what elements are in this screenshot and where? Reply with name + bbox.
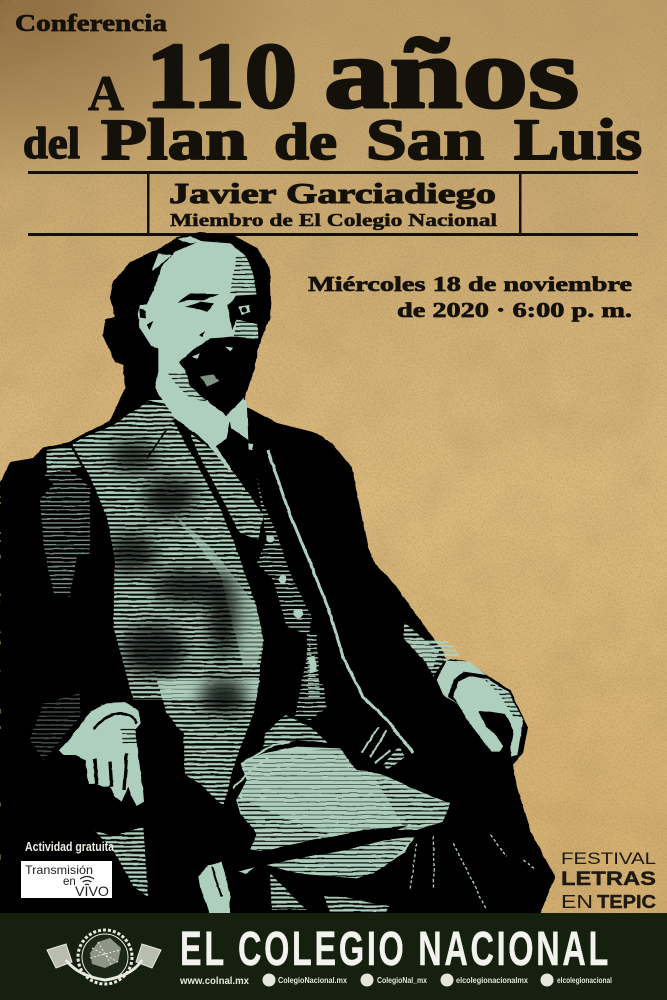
free activity note: Actividad gratuita [25, 839, 115, 854]
hand [59, 703, 144, 806]
skin [138, 241, 258, 448]
coat lower stripes [157, 680, 260, 807]
ear detail [139, 308, 146, 318]
festival label: FESTIVAL [561, 849, 656, 868]
title: Luis [514, 107, 642, 172]
festival label: TEPIC [597, 892, 656, 912]
left hand region [30, 678, 260, 913]
icon: twitter [360, 974, 374, 986]
speaker role: Miembro de El Colegio Nacional [170, 210, 497, 230]
lower hand speck [238, 867, 255, 873]
waistcoat edge line [268, 450, 413, 753]
title: del [23, 119, 80, 168]
left banner [47, 944, 72, 968]
live stream badge [21, 861, 112, 899]
forehead shade stripes [230, 255, 258, 295]
knee side stripes [93, 827, 148, 897]
title: 110 [146, 25, 297, 128]
sleeve specks [30, 693, 80, 760]
jacket bright lapel edge [170, 510, 263, 667]
live stream badge: VIVO [75, 883, 109, 899]
title: de [274, 114, 337, 171]
social links: ColegioNacional.mx [278, 975, 347, 985]
title: A [88, 65, 124, 121]
sleeve end stripes [405, 640, 460, 677]
hair highlight [152, 253, 172, 271]
vest stripes [257, 477, 312, 635]
live stream badge: Transmisión [25, 863, 93, 877]
watch chain fingers [362, 727, 391, 763]
lapel notch line [147, 430, 167, 458]
right sleeve stripes [404, 622, 439, 670]
lower leg stripes [263, 835, 417, 880]
left eye [185, 302, 214, 312]
icon: youtube [440, 974, 454, 986]
thigh lower shade [237, 797, 330, 853]
vest lower specks [307, 633, 320, 700]
icon: instagram [540, 974, 554, 986]
neck stripes [167, 372, 207, 402]
date and time: de 2020 · 6:00 p. m. [397, 298, 632, 322]
coat lower shadow [200, 678, 247, 715]
footer band [0, 913, 667, 1000]
finger gap [478, 712, 513, 755]
left brow [177, 293, 219, 302]
hair top highlight [177, 236, 203, 243]
icon: wifi [80, 876, 94, 885]
thigh [237, 747, 450, 853]
vest side of lapel stripes [190, 433, 263, 540]
right eye glint [238, 305, 251, 315]
belly stripes [383, 747, 405, 769]
mouth highlight [200, 374, 219, 387]
finger gaps [95, 753, 127, 790]
social links [179, 974, 612, 987]
festival label: EN [561, 892, 593, 912]
tie speck [248, 443, 253, 451]
festival label [561, 849, 656, 912]
cuff line [94, 713, 137, 729]
logo: institution seal [47, 930, 161, 984]
nose tick [199, 330, 205, 337]
banner ribbon [66, 960, 142, 980]
left arm sparse stripes [40, 470, 90, 597]
thigh shade stripes [237, 747, 450, 853]
social links: ColegioNal_mx [377, 975, 427, 985]
necktie [217, 427, 260, 493]
right pupil [241, 307, 247, 313]
leg and right hand region [233, 640, 534, 912]
lower hand [198, 862, 230, 913]
lower leg [267, 837, 415, 878]
cuff [437, 660, 487, 705]
lapel dark edge [175, 418, 242, 543]
label: Conferencia: Conferencia [15, 11, 167, 37]
cheek stripes [233, 320, 258, 340]
moustache and beard [179, 337, 258, 416]
silhouette [0, 232, 555, 914]
social links: elcolegionacionalmx [456, 975, 528, 985]
stripes above thigh [263, 715, 328, 747]
bottom stripes left [270, 873, 307, 910]
date and time [308, 272, 632, 322]
portrait of seated man [0, 232, 555, 914]
title [23, 18, 642, 172]
lower hand line [212, 867, 222, 897]
festival label: LETRAS [561, 869, 656, 890]
arm highlight stripes [47, 447, 82, 473]
title: San [366, 107, 484, 172]
speaker name: Javier Garciadiego [169, 179, 496, 210]
jacket shadows [107, 442, 238, 677]
bottom stripes center [323, 895, 390, 912]
live stream badge: en [63, 876, 76, 888]
right hand [453, 676, 523, 757]
social links: www.colnal.mx [179, 976, 249, 987]
eagle emblem [90, 938, 121, 968]
fold under thigh [250, 825, 408, 861]
cuff shadow stripes [120, 727, 142, 747]
ear fold [147, 321, 153, 330]
vest buttons [266, 536, 317, 673]
moustache specks [192, 347, 233, 358]
main jacket stripes [72, 403, 263, 700]
thigh right shade [377, 780, 450, 827]
right brow and eye [227, 294, 267, 330]
social links: elcolegionacional [557, 975, 612, 985]
knuckle shade [483, 678, 523, 718]
shirt and neck [147, 400, 248, 472]
vest lower stripes [295, 640, 326, 720]
emblem speckle [90, 942, 120, 966]
title: años [324, 18, 579, 129]
speaker frame [28, 171, 638, 236]
title: Plan [101, 107, 247, 172]
drape streaks [410, 835, 534, 910]
thigh highlight slices [233, 742, 290, 788]
right banner [136, 944, 161, 968]
icon: facebook [262, 974, 276, 986]
upper body halftone [40, 400, 320, 700]
face and head [138, 236, 267, 448]
date and time: Miércoles 18 de noviembre [308, 272, 632, 296]
